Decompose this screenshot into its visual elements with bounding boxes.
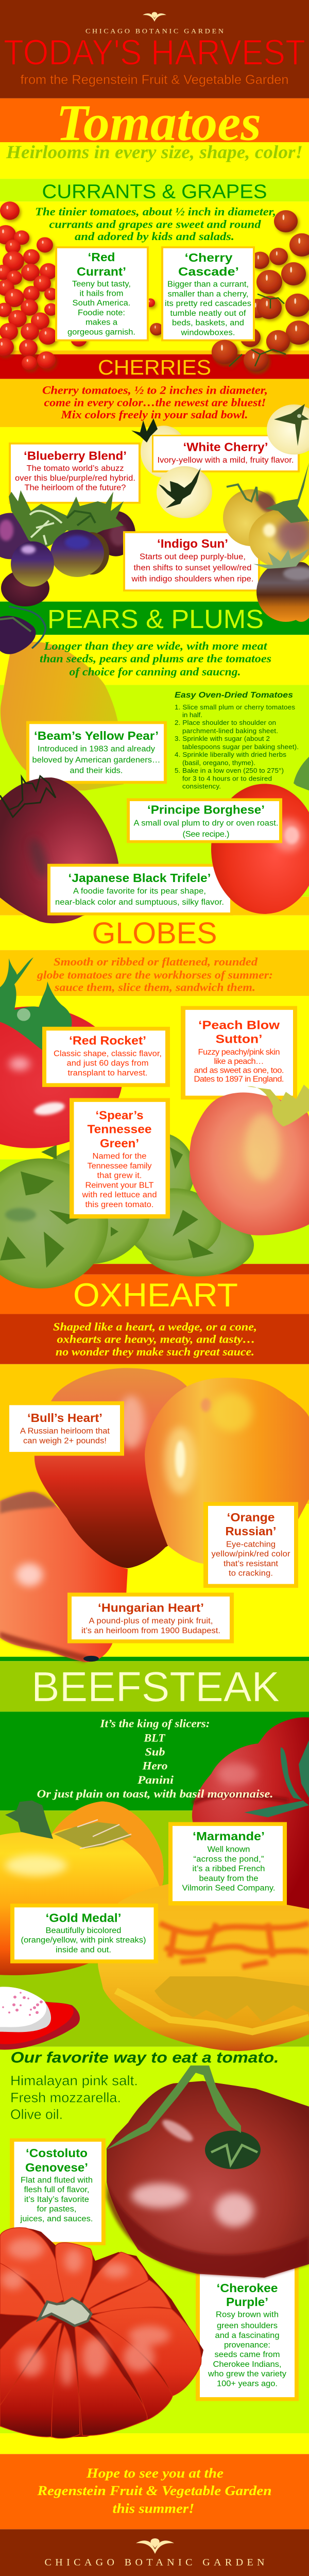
- card heading: Russian’: [226, 1525, 276, 1538]
- card body: Flat and fluted with: [21, 2176, 93, 2184]
- card body: Eye-catching: [226, 1540, 276, 1549]
- card: Peach Blow Sutton: [181, 1006, 297, 1099]
- photo: Bull's Heart tomato: [35, 1368, 206, 1568]
- card heading: Sutton’: [215, 1032, 263, 1046]
- serving list: Olive oil.: [10, 2107, 63, 2122]
- card body: [20, 2176, 93, 2223]
- card body: A Russian heirloom that: [20, 1427, 110, 1435]
- recipe steps: consistency.: [182, 783, 221, 790]
- intro text: beefsteak: Sub: [145, 1745, 165, 1758]
- intro text: beefsteak: Or just plain on toast, with basil mayonnaise.: [37, 1788, 273, 1801]
- card body: like a peach…: [214, 1057, 264, 1066]
- intro text: beefsteak: Panini: [137, 1774, 174, 1787]
- card body: flesh full of flavor,: [24, 2186, 90, 2194]
- intro text: cherries: [42, 384, 268, 421]
- card heading: ‘Indigo Sun’: [157, 537, 228, 551]
- card body: Teeny but tasty,: [72, 280, 131, 289]
- calyx: [0, 957, 72, 1050]
- calyx leaves: [9, 490, 124, 550]
- card body: [20, 1427, 110, 1445]
- card body: [67, 280, 135, 336]
- card body: 100+ years ago.: [217, 2380, 278, 2388]
- card body: [81, 1617, 220, 1635]
- card heading: [198, 1019, 280, 1046]
- card body: [32, 745, 161, 775]
- card body: transplant to harvest.: [68, 1069, 148, 1077]
- card body: and a fascinating: [215, 2331, 280, 2340]
- card heading: ‘Peach Blow: [198, 1019, 280, 1032]
- recipe steps: for 3 to 4 hours or to desired: [182, 775, 272, 783]
- card body: green shoulders: [217, 2322, 278, 2330]
- card: Beam's Yellow Pear: [26, 721, 167, 784]
- intro text: globes: sauce them, slice them, sandwich them.: [54, 981, 255, 994]
- card heading: [88, 1109, 151, 1150]
- intro text: oxheart: no wonder they make such great sauce.: [56, 1346, 254, 1359]
- recipe heading: Easy Oven-Dried Tomatoes: [175, 690, 293, 700]
- card heading: ‘Marmande’: [193, 1830, 265, 1843]
- closing message: this summer!: [113, 2501, 195, 2516]
- card: Red Rocket: [42, 1027, 170, 1087]
- subheading: our favorite way: Our favorite way to eat a tomato.: [10, 2049, 279, 2066]
- card heading: ‘Beam’s Yellow Pear’: [34, 730, 159, 743]
- intro text: currants and grapes: [35, 206, 276, 243]
- card body: “across the pond,”: [194, 1855, 264, 1863]
- card body: inside and out.: [56, 1946, 111, 1954]
- header: botanic garden logo: [143, 12, 166, 22]
- card body: [55, 887, 224, 907]
- recipe steps: (basil, oregano, thyme).: [182, 759, 255, 767]
- recipe steps: 3. Sprinkle with sugar (about 2: [175, 735, 270, 742]
- section heading: pears and plums: PEARS & PLUMS: [47, 605, 264, 634]
- photo: Cherokee Purple tomato: [106, 2065, 309, 2278]
- intro text: pears and plums: Longer than they are wide, with more meat: [43, 640, 268, 653]
- card heading: ‘Blueberry Blend’: [24, 449, 127, 463]
- card body: [15, 465, 135, 492]
- photo: Peach Blow Sutton tomato: [189, 1084, 309, 1235]
- calyx: [0, 776, 56, 817]
- card heading: ‘Orange: [227, 1511, 275, 1524]
- card: Orange Russian: [203, 1502, 298, 1588]
- card heading: ‘Bull’s Heart’: [27, 1412, 102, 1425]
- card body: and as sweet as one, too.: [194, 1066, 284, 1075]
- card body: [81, 1153, 157, 1209]
- closing message: Regenstein Fruit & Vegetable Garden: [37, 2483, 272, 2498]
- card heading: ‘Gold Medal’: [45, 1911, 122, 1925]
- intro text: cherries: Mix colors freely in your salad bowl.: [60, 409, 248, 421]
- calyx: [247, 1084, 309, 1127]
- card body: [165, 280, 251, 337]
- recipe steps: parchment-lined baking sheet.: [182, 727, 278, 735]
- card body: Bigger than a currant,: [167, 280, 249, 289]
- card heading: ‘White Cherry’: [183, 440, 268, 454]
- section heading: beefsteak: BEEFSTEAK: [31, 1663, 280, 1710]
- card body: A pound-plus of meaty pink fruit,: [89, 1617, 213, 1625]
- card: Red Currant: [55, 246, 149, 341]
- card body: beds, baskets, and: [172, 319, 244, 327]
- intro text: beefsteak: Hero: [142, 1759, 168, 1772]
- serving list: Fresh mozzarella.: [10, 2090, 121, 2105]
- card body: and just 60 days from: [67, 1059, 149, 1068]
- card heading: ‘Spear’s: [96, 1109, 144, 1122]
- card body: yellow/pink/red color: [212, 1550, 290, 1558]
- card body: makes a: [85, 318, 117, 327]
- section heading: globes: GLOBES: [92, 917, 217, 950]
- card body: A foodie favorite for its pear shape,: [73, 887, 206, 896]
- card heading: [226, 1511, 276, 1538]
- card heading: [217, 2282, 278, 2309]
- card body: Cherokee Indians,: [213, 2360, 281, 2369]
- card heading: Purple’: [226, 2296, 268, 2309]
- photo: white cherry centre: [157, 466, 212, 518]
- card body: near-black color and sumptuous, silky flavor.: [55, 899, 224, 907]
- photo: Beam's yellow pear: [0, 606, 124, 790]
- card body: The tomato world’s abuzz: [27, 465, 124, 473]
- intro text: currants and grapes: and adored by kids and salads.: [75, 230, 234, 243]
- card heading: ‘Cherokee: [217, 2282, 278, 2295]
- card body: Ivory-yellow with a mild, fruity flavor.: [157, 456, 294, 465]
- card heading: ‘Red: [88, 251, 115, 264]
- main heading: Tomatoes: Tomatoes: [56, 95, 261, 151]
- lobe highlights: [2, 2238, 170, 2386]
- stem and calyx: [106, 2065, 261, 2169]
- recipe: easy oven-dried tomatoes: [175, 690, 299, 790]
- card body: [134, 819, 278, 839]
- card: Japanese Black Trifele: [47, 864, 233, 916]
- card heading: Cascade’: [178, 265, 239, 279]
- subtitle: from the Regenstein Fruit & Vegetable Garden: [20, 72, 289, 87]
- photo: Orange Russian tomato: [145, 1378, 309, 1564]
- intro text: beefsteak: It’s the king of slicers:: [100, 1717, 210, 1730]
- intro text: pears and plums: of choice for canning and saucng.: [69, 665, 241, 679]
- photo: Hungarian Heart tomato: [0, 1492, 128, 1662]
- intro text: cherries: come in every color…the newest are bluest!: [44, 396, 266, 410]
- card: Marmande: [168, 1822, 287, 1906]
- intro text: oxheart: [53, 1320, 257, 1359]
- card body: its pretty red cascades: [165, 300, 251, 308]
- card body: Starts out deep purply-blue,: [140, 553, 246, 561]
- photo: Red Rocket tomato: [0, 957, 123, 1148]
- closing message: Hope to see you at the: [86, 2466, 224, 2481]
- footer: botanic garden logo: [136, 2538, 174, 2554]
- card body: windowboxes.: [180, 329, 235, 337]
- intro text: pears and plums: [40, 640, 271, 679]
- card body: it’s Italy’s favorite: [24, 2195, 89, 2204]
- card body: to cracking.: [229, 1569, 273, 1578]
- card heading: ‘Costoluto: [26, 2147, 88, 2160]
- card body: [182, 1845, 275, 1892]
- card body: over this blue/purple/red hybrid.: [15, 474, 135, 483]
- section heading: oxheart: OXHEART: [73, 1277, 238, 1313]
- recipe steps: 2. Place shoulder to shoulder on: [175, 719, 276, 726]
- card body: this green tomato.: [85, 1200, 154, 1209]
- card body: Reinvent your BLT: [85, 1181, 154, 1190]
- purple stem top: [0, 606, 45, 654]
- card body: (See recipe.): [182, 831, 230, 839]
- photo: Gold Medal slice: [98, 1884, 309, 2051]
- card heading: [77, 251, 126, 279]
- intro text: currants and grapes: currants and grapes are sweet and round: [49, 218, 261, 231]
- card: Hungarian Heart: [67, 1592, 234, 1643]
- card body: beloved by American gardeners…: [32, 756, 161, 765]
- card body: Classic shape, classic flavor,: [54, 1049, 162, 1058]
- card body: [21, 1926, 146, 1954]
- card body: that’s resistant: [224, 1560, 279, 1568]
- illustration: tomato and mozzarella slices: [0, 1987, 80, 2050]
- intro text: currants and grapes: The tinier tomatoes, about ½ inch in diameter,: [35, 206, 276, 218]
- card body: Vilmorin Seed Company.: [182, 1884, 275, 1892]
- recipe steps: tablespoons sugar per baking sheet).: [182, 743, 299, 751]
- photo: Gold Medal tomato: [0, 1801, 164, 1975]
- intro text: cherries: Cherry tomatoes, ½ to 2 inches in diameter,: [42, 384, 268, 397]
- card body: Rosy brown with: [216, 2311, 279, 2319]
- section heading: cherries: CHERRIES: [98, 355, 211, 380]
- card body: beauty from the: [199, 1874, 259, 1883]
- card body: [54, 1049, 162, 1077]
- card body: tumble neatly out of: [170, 309, 246, 318]
- card body: it’s an heirloom from 1900 Budapest.: [81, 1626, 220, 1635]
- card body: [212, 1540, 290, 1578]
- photo: Marmande tomato: [192, 1717, 309, 1919]
- intro text: oxheart: Shaped like a heart, a wedge, or a cone,: [53, 1320, 257, 1333]
- closing message: [37, 2466, 272, 2516]
- header: garden name: CHICAGO BOTANIC GARDEN: [85, 27, 224, 35]
- card body: South America.: [72, 299, 131, 308]
- serving list: Himalayan pink salt.: [10, 2073, 138, 2088]
- card body: Introduced in 1983 and already: [38, 745, 155, 754]
- photo: Spear's Tennessee Green tomato slices: [0, 1133, 254, 1289]
- card body: with indigo shoulders when ripe.: [131, 575, 254, 583]
- card body: Named for the: [93, 1153, 147, 1161]
- recipe steps: 5. Bake in a low oven (250 to 275°): [175, 767, 284, 774]
- card body: (orange/yellow, with pink streaks): [21, 1936, 146, 1944]
- card: Spear's Tennessee Green: [70, 1098, 170, 1218]
- photo: cherry cascade tomato cluster: [150, 210, 309, 371]
- card body: [208, 2311, 286, 2388]
- card body: juices, and sauces.: [20, 2215, 93, 2223]
- intro text: beefsteak: [37, 1717, 273, 1801]
- tagline: Heirlooms in every size, shape, color!: [6, 142, 303, 162]
- section heading: currants and grapes: CURRANTS & GRAPES: [42, 181, 267, 202]
- card body: can weigh 2+ pounds!: [23, 1437, 107, 1445]
- card body: and their kids.: [70, 767, 123, 775]
- intro text: pears and plums: than seeds, pears and plums are the tomatoes: [40, 652, 271, 665]
- photo: red currant tomato cluster: [0, 201, 155, 370]
- card body: Fuzzy peachy/pink skin: [198, 1048, 280, 1057]
- card heading: [178, 251, 239, 279]
- photo: Japanese Black Trifele tomato: [0, 776, 118, 923]
- card body: gorgeous garnish.: [67, 328, 135, 336]
- card heading: Green’: [100, 1137, 139, 1150]
- serving list: [10, 2073, 138, 2122]
- photo: white cherry top right: [267, 404, 309, 454]
- photo: Costoluto Genovese tomato: [0, 2228, 203, 2438]
- card heading: Genovese’: [25, 2161, 88, 2175]
- shoulder cracks: [54, 1822, 131, 1849]
- intro text: globes: Smooth or ribbed or flattened, rounded: [54, 956, 258, 969]
- card: Bull's Heart: [0, 1401, 124, 1456]
- intro text: globes: [37, 956, 273, 994]
- card heading: ‘Cherry: [185, 251, 233, 265]
- card body: The heirloom of the future?: [24, 484, 126, 492]
- recipe steps: 1. Slice small plum or cherry tomatoes: [175, 704, 295, 711]
- card body: provenance:: [224, 2341, 270, 2349]
- recipe steps: 4. Sprinkle liberally with dried herbs: [175, 751, 286, 758]
- photo: tomatoes overlapping the cherries band: [212, 330, 290, 371]
- intro text: beefsteak: BLT: [144, 1732, 165, 1744]
- card heading: ‘Principe Borghese’: [147, 803, 265, 817]
- photo: white cherry tomato behind cards: [131, 418, 187, 478]
- card: Cherry Cascade: [161, 246, 255, 341]
- card: Cherokee Purple: [196, 2265, 299, 2401]
- card body: who grew the variety: [208, 2370, 286, 2379]
- photo: Principe Borghese tomato: [211, 757, 309, 914]
- card: Principe Borghese: [127, 798, 282, 843]
- card body: Tennessee family: [88, 1162, 152, 1171]
- photo: blueberry blend tomatoes: [0, 490, 135, 606]
- card: White Cherry: [152, 435, 300, 472]
- card body: Beautifully bicolored: [45, 1926, 122, 1935]
- recipe steps: in half.: [182, 711, 202, 719]
- intro text: globes: globe tomatoes are the workhorses of summer:: [37, 969, 273, 981]
- card body: [194, 1048, 284, 1083]
- recipe steps: [175, 704, 299, 790]
- card heading: Tennessee: [88, 1123, 152, 1136]
- card body: Well known: [208, 1845, 250, 1854]
- card body: for pastes,: [37, 2205, 76, 2214]
- footer: garden name: CHICAGO BOTANIC GARDEN: [45, 2557, 265, 2568]
- card: Blueberry Blend: [9, 443, 141, 504]
- intro text: oxheart: oxhearts are heavy, meaty, and tasty…: [57, 1333, 255, 1346]
- card: Indigo Sun: [123, 531, 260, 591]
- card: Costoluto Genovese: [10, 2138, 106, 2245]
- card heading: ‘Red Rocket’: [69, 1034, 146, 1047]
- card body: then shifts to sunset yellow/red: [134, 564, 251, 572]
- card body: with red lettuce and: [81, 1191, 157, 1199]
- card heading: Currant’: [77, 265, 126, 279]
- stem scar: [39, 2298, 91, 2326]
- card body: that grew it.: [97, 1172, 142, 1180]
- card: Gold Medal: [10, 1904, 158, 1963]
- card heading: [25, 2147, 88, 2175]
- photo: indigo sun tomatoes: [223, 463, 309, 622]
- stem and sepals: [244, 1740, 309, 1817]
- card heading: ‘Japanese Black Trifele’: [68, 872, 211, 885]
- card body: A small oval plum to dry or oven roast.: [134, 819, 278, 828]
- card body: seeds came from: [214, 2351, 280, 2359]
- card body: Foodie note:: [78, 309, 125, 317]
- card body: it hails from: [80, 290, 124, 298]
- card body: [131, 553, 254, 583]
- card body: it’s a ribbed French: [193, 1865, 265, 1873]
- card body: Dates to 1897 in England.: [194, 1075, 284, 1083]
- calyx: [5, 1801, 53, 1839]
- card body: smaller than a cherry,: [168, 290, 249, 298]
- card heading: ‘Hungarian Heart’: [98, 1601, 204, 1615]
